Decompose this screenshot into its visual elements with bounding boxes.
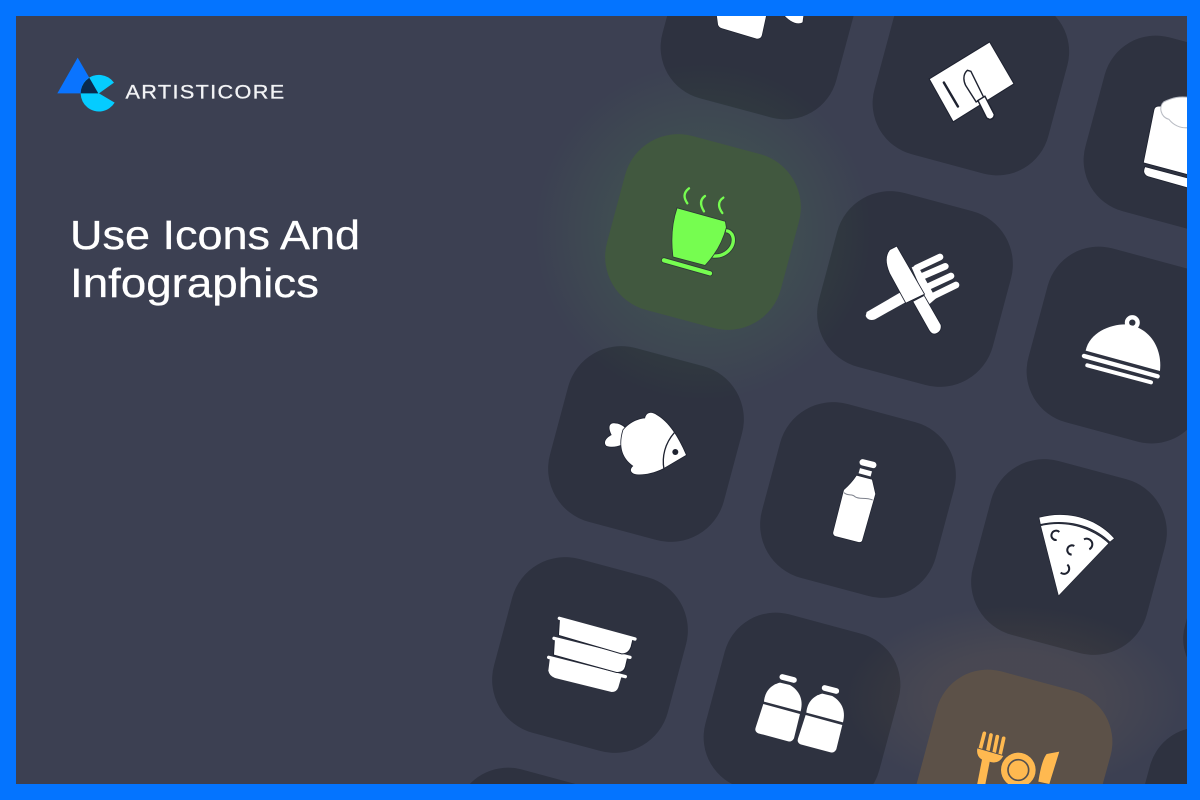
tile: bottom left partial bbox=[461, 768, 601, 797]
glow: orange bbox=[844, 605, 1184, 795]
tile: restaurant highlighted bbox=[914, 670, 1112, 792]
tile: fish bbox=[536, 334, 756, 554]
icon: coffee cup bbox=[664, 188, 733, 273]
icon: clipped dish bbox=[717, 14, 804, 39]
icon: crossed knife and fork bbox=[866, 247, 956, 334]
icon: serving dome bbox=[1084, 317, 1160, 382]
logo wordmark: ARTISTICORE bbox=[126, 82, 286, 104]
tile: pizza bbox=[959, 447, 1179, 667]
tile: beer mug bbox=[1084, 36, 1195, 231]
icon: pizza slice bbox=[1039, 515, 1114, 595]
tile: salt and pepper bbox=[704, 613, 900, 793]
icon: beer mug bbox=[1144, 97, 1190, 188]
tile: knife and fork bbox=[805, 179, 1025, 399]
title bbox=[70, 212, 360, 306]
glow: green bbox=[533, 62, 873, 402]
logo mark bbox=[57, 58, 115, 112]
tile: cutting board bbox=[873, 1, 1069, 175]
title: Infographics bbox=[70, 260, 319, 306]
icon: fish bbox=[605, 413, 686, 474]
logo bbox=[57, 58, 285, 112]
tile: top partial icon bbox=[661, 2, 857, 119]
icon: cutting board and knife bbox=[930, 43, 1013, 121]
tile: bottom right partial bbox=[1142, 728, 1195, 795]
tile: stacked bowls bbox=[480, 545, 700, 765]
icon: salt and pepper shakers bbox=[755, 677, 844, 753]
icon: plate, fork and knife bbox=[977, 733, 1059, 787]
tile: bottle bbox=[748, 390, 968, 610]
icon: stacked bowls bbox=[548, 618, 635, 692]
tile: coffee highlighted bbox=[593, 122, 813, 342]
icon: bottle bbox=[833, 462, 875, 542]
title: Use Icons And bbox=[70, 212, 360, 258]
tile: serving dome bbox=[1027, 247, 1196, 443]
tile: right edge partial bbox=[1183, 588, 1195, 670]
